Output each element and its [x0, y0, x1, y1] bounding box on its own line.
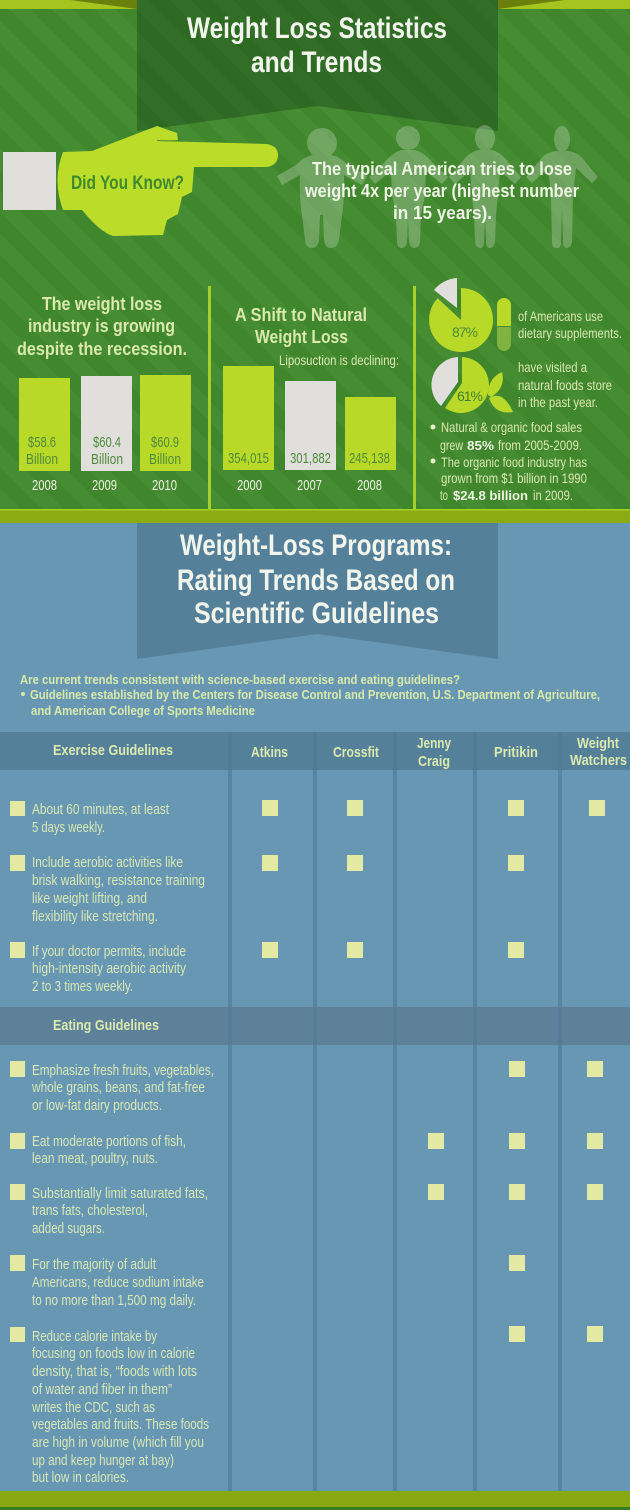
text: natural foods store — [518, 359, 612, 410]
text: organic food bullets: $24.8 billion — [453, 488, 528, 503]
heading: weight loss industry: despite the recession. — [17, 339, 187, 359]
eating row 1 — [10, 1061, 603, 1114]
exercise row 1 — [10, 800, 605, 836]
bar: 2009: 2009 — [92, 477, 117, 494]
eating row 5: are high in volume (which fill you — [32, 1435, 204, 1451]
bar: 2007: 2007 — [297, 477, 322, 494]
pie chart: 87 percent: 87% — [452, 324, 478, 340]
icon: pointing hand with Did You Know — [3, 126, 278, 236]
text: organic food bullets: 85% — [467, 438, 494, 453]
table header labels: Pritikin — [494, 744, 538, 761]
olive band: section divider — [0, 509, 630, 523]
eating row 1: whole grains, beans, and fat-free — [31, 1080, 205, 1096]
bar chart: industry revenue — [19, 375, 191, 494]
heading: eating guidelines: Eating Guidelines — [53, 1017, 159, 1034]
bar: 2008: 245,138 — [349, 450, 390, 467]
text: dietary supplements — [518, 308, 622, 341]
eating row 3: trans fats, cholesterol, — [32, 1203, 148, 1219]
text: intro question and guidelines — [20, 672, 600, 718]
heading: weight loss industry — [17, 294, 187, 359]
divider right — [413, 286, 416, 510]
silhouette: slim person — [526, 126, 598, 248]
table header labels — [53, 735, 627, 770]
panel: blue programs section — [0, 523, 630, 1491]
exercise row 2: brisk walking, resistance training — [32, 873, 205, 889]
silhouette: largest person — [277, 128, 367, 248]
icon: four body silhouettes — [277, 125, 598, 248]
table header labels: Atkins — [251, 744, 288, 761]
text: typical American statistic: in 15 years). — [393, 203, 492, 223]
eating row 5: writes the CDC, such as — [31, 1400, 155, 1416]
eating row 3: added sugars. — [32, 1221, 105, 1237]
bar: 2010: Billion — [149, 451, 181, 468]
pie chart: 87 percent — [429, 278, 493, 352]
text: typical American statistic: The typical American tries to lose — [312, 159, 572, 179]
bar: 2000: 354,015 — [228, 450, 269, 467]
eating guidelines band — [0, 1007, 630, 1045]
pie chart: 61 percent — [431, 357, 489, 413]
text: organic food bullets: from 2005-2009. — [498, 437, 582, 453]
eating row 2 — [10, 1133, 603, 1167]
title banner: Weight Loss Statistics — [187, 12, 447, 45]
table header labels: Exercise Guidelines — [53, 742, 173, 759]
eating row 3 — [10, 1184, 603, 1237]
bar: 2009: Billion — [91, 451, 123, 468]
title banner — [137, 0, 498, 131]
exercise row 3 — [10, 942, 524, 995]
text: organic food bullets — [430, 419, 587, 503]
exercise row 2: flexibility like stretching. — [32, 909, 158, 925]
title banner: and Trends — [251, 46, 382, 79]
icon: supplement pill — [497, 298, 511, 351]
eating row 5 — [10, 1326, 603, 1486]
bar: 2008: $58.6 — [28, 434, 56, 451]
text: organic food bullets: The organic food industry has — [441, 454, 587, 470]
olive band: footer — [0, 1491, 630, 1510]
bar: 2010: $60.9 — [151, 434, 179, 451]
exercise row 2: like weight lifting, and — [32, 891, 147, 907]
text: typical American statistic — [304, 159, 579, 223]
icon: leaves — [488, 372, 513, 412]
heading: weight loss industry: industry is growing — [28, 316, 175, 336]
column dividers — [228, 732, 562, 1491]
bar: 2009: $60.4 — [93, 434, 121, 451]
eating row 4: Americans, reduce sodium intake — [32, 1275, 204, 1291]
eating row 5: up and keep hunger at bay) — [32, 1453, 174, 1469]
text: typical American statistic: weight 4x per year (highest number — [304, 181, 579, 201]
bar chart: liposuction — [223, 366, 396, 494]
table header band — [0, 732, 630, 770]
pie chart: 61 percent: 61% — [457, 388, 483, 404]
panel: green statistics section — [0, 0, 630, 510]
bar: 2007 — [285, 381, 336, 494]
text: organic food bullets: to — [440, 487, 448, 503]
exercise row 2: Include aerobic activities like — [32, 855, 183, 871]
text: organic food bullets: in 2009. — [533, 487, 573, 503]
eating row 2: Eat moderate portions of fish, — [32, 1134, 186, 1150]
exercise row 3: high-intensity aerobic activity — [32, 961, 187, 977]
table header labels: Jenny — [417, 735, 452, 752]
table header labels: Craig — [418, 753, 450, 770]
eating row 1: Emphasize fresh fruits, vegetables, — [32, 1063, 214, 1079]
text: dietary supplements: of Americans use — [518, 308, 603, 324]
eating row 5: but low in calories. — [32, 1470, 129, 1486]
text: natural foods store: have visited a — [518, 359, 587, 375]
eating row 5: density, that is, “foods with lots — [32, 1364, 197, 1380]
heading: weight loss industry: The weight loss — [42, 294, 162, 314]
top ribbon right — [498, 0, 630, 9]
eating row 5: Reduce calorie intake by — [32, 1329, 158, 1345]
title banner: Rating Trends Based on — [177, 564, 455, 597]
bar: 2008 — [345, 397, 396, 494]
eating row 5: vegetables and fruits. These foods — [32, 1417, 209, 1433]
divider left — [208, 286, 211, 510]
eating row 4: to no more than 1,500 mg daily. — [32, 1293, 196, 1309]
bar: 2010 — [140, 375, 191, 494]
silhouette: second person — [369, 126, 448, 248]
icon: pointing hand with Did You Know: Did You Know? — [71, 173, 184, 194]
eating row 3: Substantially limit saturated fats, — [32, 1186, 208, 1202]
bar: 2008: Billion — [26, 451, 58, 468]
title banner — [137, 523, 498, 659]
silhouette: third person — [449, 125, 521, 248]
bar: 2007: 301,882 — [290, 450, 331, 467]
title banner: Scientific Guidelines — [194, 597, 439, 630]
bar: 2008 — [19, 378, 70, 494]
eating row 5: of water and fiber in them” — [32, 1382, 172, 1398]
text: organic food bullets: Natural & organic food sales — [441, 419, 582, 435]
exercise row 3: If your doctor permits, include — [32, 944, 186, 960]
text: organic food bullets: grew — [440, 437, 464, 453]
table header labels: Crossfit — [333, 744, 379, 761]
bar: 2000: 2000 — [237, 477, 262, 494]
exercise row 1: About 60 minutes, at least — [32, 802, 169, 818]
exercise row 1: 5 days weekly. — [32, 820, 105, 836]
eating row 2: lean meat, poultry, nuts. — [32, 1151, 158, 1167]
bar: 2008: 2008 — [32, 477, 57, 494]
heading: shift to natural weight loss: Liposuction is declining: — [279, 352, 399, 368]
heading: shift to natural weight loss: A Shift to Natural — [235, 305, 367, 325]
exercise row 2 — [10, 855, 524, 925]
text: intro question and guidelines: and American College of Sports Medicine — [31, 703, 255, 718]
exercise row 3: 2 to 3 times weekly. — [32, 979, 133, 995]
bar: 2010: 2010 — [152, 477, 177, 494]
text: natural foods store: in the past year. — [518, 394, 598, 410]
bar: 2008: 2008 — [357, 477, 382, 494]
bar: 2009 — [81, 376, 132, 494]
heading: shift to natural weight loss — [235, 305, 399, 368]
text: intro question and guidelines: Are current trends consistent with science-based exercise and eating guidelines? — [20, 672, 460, 687]
title banner: Weight-Loss Programs: — [180, 529, 452, 562]
top ribbon left — [0, 0, 137, 9]
heading: shift to natural weight loss: Weight Loss — [255, 327, 348, 347]
table header labels: Weight — [577, 735, 619, 752]
text: organic food bullets: grown from $1 billion in 1990 — [441, 470, 587, 486]
eating row 4 — [10, 1255, 525, 1309]
bar: 2000 — [223, 366, 274, 494]
eating row 4: For the majority of adult — [32, 1257, 156, 1273]
eating row 1: or low-fat dairy products. — [32, 1098, 162, 1114]
eating row 5: focusing on foods low in calorie — [32, 1346, 195, 1362]
